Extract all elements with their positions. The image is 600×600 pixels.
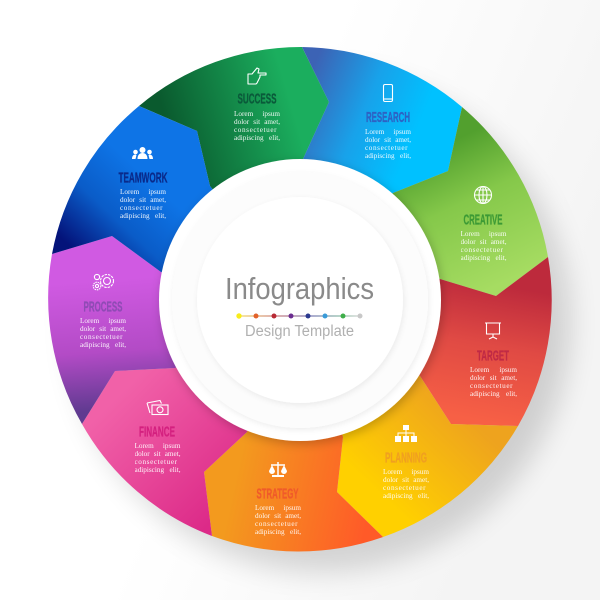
heading: process: PROCESS	[84, 300, 123, 316]
text: creative body: consectetuer	[460, 246, 504, 254]
text: teamwork body: dolor sit amet,	[120, 196, 166, 204]
heading: success: SUCCESS	[238, 92, 277, 108]
text: planning body: consectetuer	[383, 484, 426, 492]
text: success body: adipiscing elit,	[234, 134, 280, 142]
title: Infographics	[225, 271, 374, 306]
text: creative body: dolor sit amet,	[460, 238, 506, 246]
icon: org chart	[395, 425, 417, 442]
heading: strategy: STRATEGY	[256, 486, 299, 502]
heading: creative: CREATIVE	[464, 212, 503, 228]
text: teamwork body	[120, 188, 166, 221]
text: planning body: adipiscing elit,	[383, 492, 429, 500]
text: finance body: Lorem ipsum	[134, 442, 180, 450]
text: success body	[234, 110, 280, 142]
text: target body: dolor sit amet,	[470, 374, 517, 382]
subtitle: Design Template	[245, 323, 354, 340]
text: target body	[470, 366, 517, 399]
panel: strategy	[204, 419, 383, 551]
text: process body: Lorem ipsum	[80, 317, 126, 325]
text: process body: dolor sit amet,	[80, 325, 126, 333]
text: teamwork body: consectetuer	[120, 204, 163, 212]
heading: target: TARGET	[477, 348, 509, 364]
text: planning body: dolor sit amet,	[383, 476, 429, 484]
icon: banknotes	[147, 400, 168, 414]
text: planning body: Lorem ipsum	[383, 468, 429, 476]
text: strategy body: dolor sit amet,	[255, 512, 301, 520]
text: finance body: adipiscing elit,	[134, 466, 180, 474]
icon: scales	[269, 462, 287, 477]
text: process body: consectetuer	[80, 333, 123, 341]
text: creative body	[460, 230, 506, 263]
heading: research: RESEARCH	[366, 110, 410, 126]
text: success body: consectetuer	[234, 126, 277, 134]
text: target body: Lorem ipsum	[470, 366, 517, 374]
text: research body: consectetuer	[365, 144, 408, 152]
panel: planning	[337, 368, 518, 537]
icon: globe	[474, 186, 492, 204]
panel: process	[48, 236, 188, 424]
heading: finance: FINANCE	[139, 424, 175, 440]
panel: creative	[384, 107, 548, 296]
text: process body: adipiscing elit,	[80, 341, 126, 349]
text: strategy body	[255, 504, 301, 537]
panel: research	[302, 47, 462, 203]
icon: team	[132, 147, 153, 159]
text: finance body: consectetuer	[134, 458, 178, 466]
text: strategy body: adipiscing elit,	[255, 528, 301, 536]
text: teamwork body: adipiscing elit,	[120, 212, 166, 220]
text: success body: Lorem ipsum	[234, 110, 280, 118]
dotted colour line	[236, 313, 362, 319]
text: finance body: dolor sit amet,	[134, 450, 180, 458]
text: planning body	[383, 468, 429, 501]
text: research body	[365, 128, 411, 160]
text: strategy body: consectetuer	[255, 520, 298, 528]
icon: presentation board	[485, 323, 501, 339]
panel: teamwork	[52, 106, 221, 275]
icon: smartphone	[384, 84, 392, 102]
text: target body: adipiscing elit,	[470, 390, 517, 398]
text: research body: dolor sit amet,	[365, 136, 411, 144]
heading: teamwork: TEAMWORK	[118, 170, 168, 186]
text: teamwork body: Lorem ipsum	[120, 188, 166, 196]
panel: success	[139, 47, 329, 199]
text: process body	[80, 317, 126, 350]
icon: gears	[93, 274, 114, 290]
text: creative body: Lorem ipsum	[460, 230, 506, 238]
icon: pointing hand	[248, 68, 266, 84]
text: finance body	[134, 442, 180, 475]
text: research body: Lorem ipsum	[365, 128, 411, 136]
panel: target	[408, 257, 552, 426]
panel: finance	[82, 361, 252, 536]
text: success body: dolor sit amet,	[234, 118, 280, 126]
text: research body: adipiscing elit,	[365, 152, 411, 160]
text: creative body: adipiscing elit,	[460, 254, 506, 262]
text: strategy body: Lorem ipsum	[255, 504, 301, 512]
text: target body: consectetuer	[470, 382, 513, 390]
center circle	[159, 159, 441, 441]
heading: planning: PLANNING	[385, 450, 427, 466]
